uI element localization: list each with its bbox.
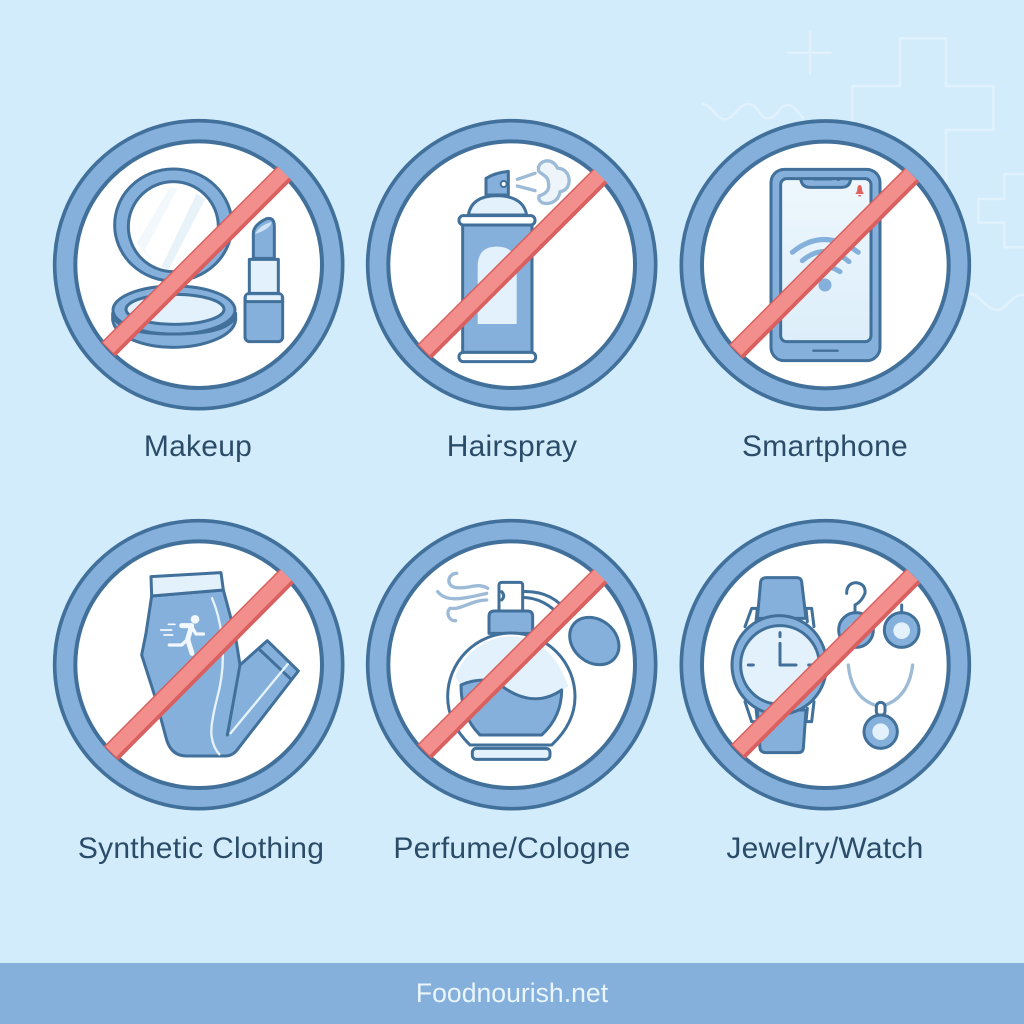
prohibition ring: [681, 121, 969, 409]
label: perfume/cologne: Perfume/Cologne: [393, 832, 631, 865]
panel: hairspray: [368, 121, 656, 409]
icon: wristwatch: [732, 578, 827, 753]
icon: wifi: [792, 239, 858, 289]
icon: smartphone: [771, 169, 880, 361]
prohibition slash: [108, 172, 284, 349]
prohibition ring: [681, 521, 969, 809]
icon: earrings: [839, 583, 919, 647]
prohibition slash: [736, 174, 912, 352]
prohibition slash: [111, 575, 287, 753]
prohibition ring: [55, 121, 343, 409]
icon: pendant necklace: [848, 665, 913, 748]
label: synthetic clothing: Synthetic Clothing: [78, 832, 324, 865]
prohibition slash: [424, 575, 600, 752]
icon: spray mist: [517, 161, 569, 204]
panel: perfume: [368, 521, 656, 809]
panel: synthetic clothing: [55, 521, 343, 809]
footer bar: [0, 963, 1024, 1024]
panel: makeup: [55, 121, 343, 409]
icon: lipstick: [245, 218, 283, 342]
icon: notification bell: [855, 185, 864, 196]
decorative medical crosses and waves: [703, 32, 1024, 310]
panel: smartphone: [681, 121, 969, 409]
prohibition ring: [368, 521, 656, 809]
panel: jewelry and watch: [681, 521, 969, 809]
footer text: Foodnourish.net: [416, 978, 609, 1008]
label: hairspray: Hairspray: [447, 430, 577, 463]
label: jewelry/watch: Jewelry/Watch: [726, 832, 924, 865]
label: smartphone: Smartphone: [742, 430, 908, 463]
icon: compact mirror: [113, 169, 236, 347]
label: makeup: Makeup: [144, 430, 252, 463]
prohibition slash: [738, 575, 913, 752]
icon: spray can: [459, 171, 536, 362]
icon: runner logo: [161, 615, 203, 653]
icon: scent waves: [438, 573, 488, 621]
prohibition ring: [368, 121, 656, 409]
icon: leggings: [142, 573, 298, 756]
prohibition slash: [424, 175, 600, 352]
prohibition ring: [55, 521, 343, 809]
icon: perfume bottle: [448, 582, 628, 759]
